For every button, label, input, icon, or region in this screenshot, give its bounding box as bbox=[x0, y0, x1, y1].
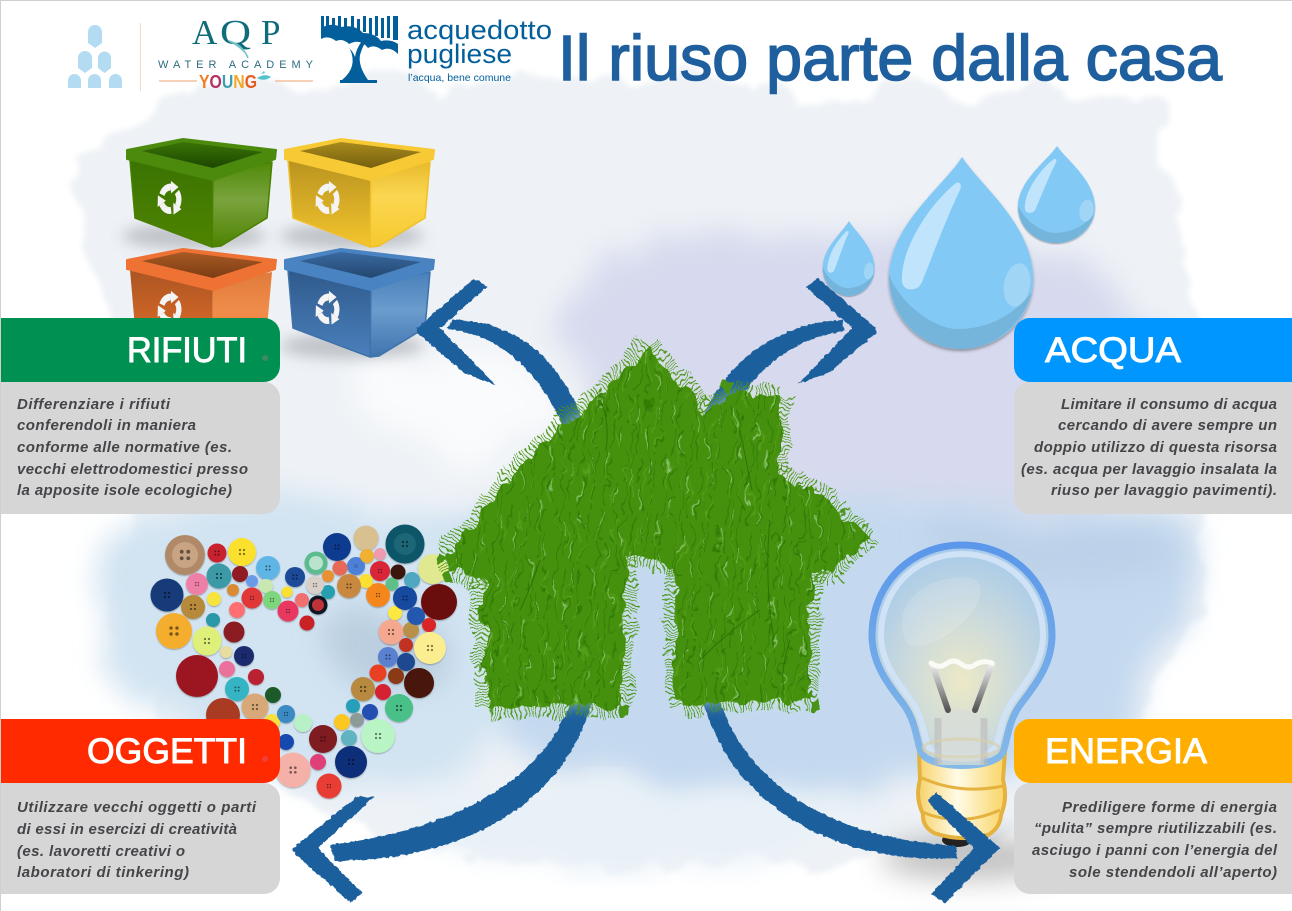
drop: right bbox=[1018, 146, 1095, 243]
energia text: “pulita” sempre riutilizzabili (es. bbox=[1034, 820, 1277, 837]
panel: energia bbox=[1014, 719, 1292, 894]
panel: rifiuti bbox=[1, 318, 280, 514]
bin: yellow bbox=[280, 139, 434, 249]
acqua text bbox=[1021, 396, 1277, 499]
rifiuti text: vecchi elettrodomestici presso bbox=[17, 461, 248, 478]
rifiuti dot bbox=[262, 355, 268, 361]
logo: AQP Water Academy Young bbox=[158, 13, 314, 92]
oggetti description box bbox=[1, 783, 280, 894]
watercolor background wash bbox=[86, 77, 1215, 867]
rifiuti description box bbox=[1, 382, 280, 514]
drop: left bbox=[823, 221, 875, 296]
energia text bbox=[1032, 799, 1278, 881]
panel: acqua bbox=[1014, 318, 1292, 514]
illustration: light bulb bbox=[872, 545, 1060, 880]
arrow: house to acqua bbox=[698, 278, 876, 432]
bulb highlight bbox=[902, 578, 980, 646]
logo: AQP Water Academy Young: Q bbox=[220, 13, 251, 52]
house dark tufts bbox=[520, 400, 790, 690]
oggetti heading: OGGETTI bbox=[87, 732, 247, 771]
logo: AQP Water Academy Young: WATER ACADEMY bbox=[158, 59, 314, 71]
energia text: asciugo i panni con l’energia del bbox=[1032, 842, 1278, 859]
rifiuti text: Differenziare i rifiuti bbox=[17, 396, 171, 413]
bulb shadow bbox=[880, 836, 1060, 880]
bin: blue bbox=[280, 249, 434, 359]
logo: AQP icon bbox=[68, 25, 122, 88]
logo: AQP Water Academy Young: A bbox=[192, 13, 218, 52]
oggetti header bbox=[1, 719, 280, 783]
rifiuti header bbox=[1, 318, 280, 382]
rifiuti text: conferendoli in maniera bbox=[17, 417, 196, 434]
logo: Acquedotto Pugliese: l’acqua, bene comune bbox=[408, 72, 511, 84]
oggetti text: laboratori di tinkering) bbox=[17, 864, 189, 881]
bulb glass bbox=[872, 545, 1052, 766]
acqua description box bbox=[1014, 382, 1292, 514]
oggetti text bbox=[17, 799, 257, 881]
acqua header bbox=[1014, 318, 1292, 382]
illustration: heart of buttons bbox=[150, 524, 457, 798]
illustration: water drops bbox=[823, 146, 1095, 349]
acqua text: Limitare il consumo di acqua bbox=[1061, 396, 1277, 413]
title: Il riuso parte dalla casa bbox=[558, 22, 1222, 94]
oggetti dot bbox=[262, 756, 268, 762]
rifiuti text bbox=[17, 396, 248, 499]
bulb inner ring bbox=[881, 554, 1043, 756]
energia text: Prediligere forme di energia bbox=[1062, 799, 1277, 816]
oggetti text: Utilizzare vecchi oggetti o parti bbox=[17, 799, 257, 816]
rifiuti text: conforme alle normative (es. bbox=[17, 439, 232, 456]
acqua heading: ACQUA bbox=[1045, 331, 1182, 370]
energia heading: ENERGIA bbox=[1045, 732, 1208, 771]
bulb stem bbox=[923, 709, 999, 765]
drop: large bbox=[889, 157, 1034, 349]
house fringe bbox=[447, 345, 868, 708]
oggetti text: di essi in esercizi di creatività bbox=[17, 821, 237, 838]
logo: Acquedotto Pugliese: pugliese bbox=[407, 39, 512, 69]
house glow bbox=[447, 345, 868, 708]
oggetti text: (es. lavoretti creativi o bbox=[17, 843, 185, 860]
illustration: grass house bbox=[447, 345, 868, 708]
bin: green bbox=[122, 139, 276, 249]
logo: Acquedotto Pugliese: acquedotto bbox=[407, 15, 552, 45]
acqua text: riuso per lavaggio pavimenti). bbox=[1051, 482, 1277, 499]
illustration: recycling bins bbox=[122, 139, 434, 359]
arrow: house to energia bbox=[702, 692, 1000, 903]
acqua text: (es. acqua per lavaggio insalata la bbox=[1021, 461, 1277, 478]
energia text: sole stendendoli all’aperto) bbox=[1069, 864, 1277, 881]
energia header bbox=[1014, 719, 1292, 783]
acqua text: doppio utilizzo di questa risorsa bbox=[1034, 439, 1277, 456]
bin: orange bbox=[127, 249, 276, 357]
logo: AQP Water Academy Young: P bbox=[261, 13, 280, 52]
logo divider bbox=[140, 23, 141, 91]
logo: Acquedotto Pugliese bbox=[321, 15, 552, 84]
house body bbox=[447, 345, 868, 708]
bulb filament bbox=[931, 661, 992, 710]
panel: oggetti bbox=[1, 719, 280, 894]
rifiuti text: la apposite isole ecologiche) bbox=[17, 482, 232, 499]
acqua text: cercando di avere sempre un bbox=[1058, 417, 1277, 434]
bulb screw base bbox=[918, 752, 1005, 847]
arrow: house to oggetti bbox=[293, 698, 592, 903]
rifiuti heading: RIFIUTI bbox=[127, 331, 247, 370]
arrow: house to rifiuti bbox=[417, 278, 586, 430]
energia description box bbox=[1014, 783, 1292, 894]
logo: AQP Water Academy Young: YOUNG bbox=[199, 72, 257, 92]
